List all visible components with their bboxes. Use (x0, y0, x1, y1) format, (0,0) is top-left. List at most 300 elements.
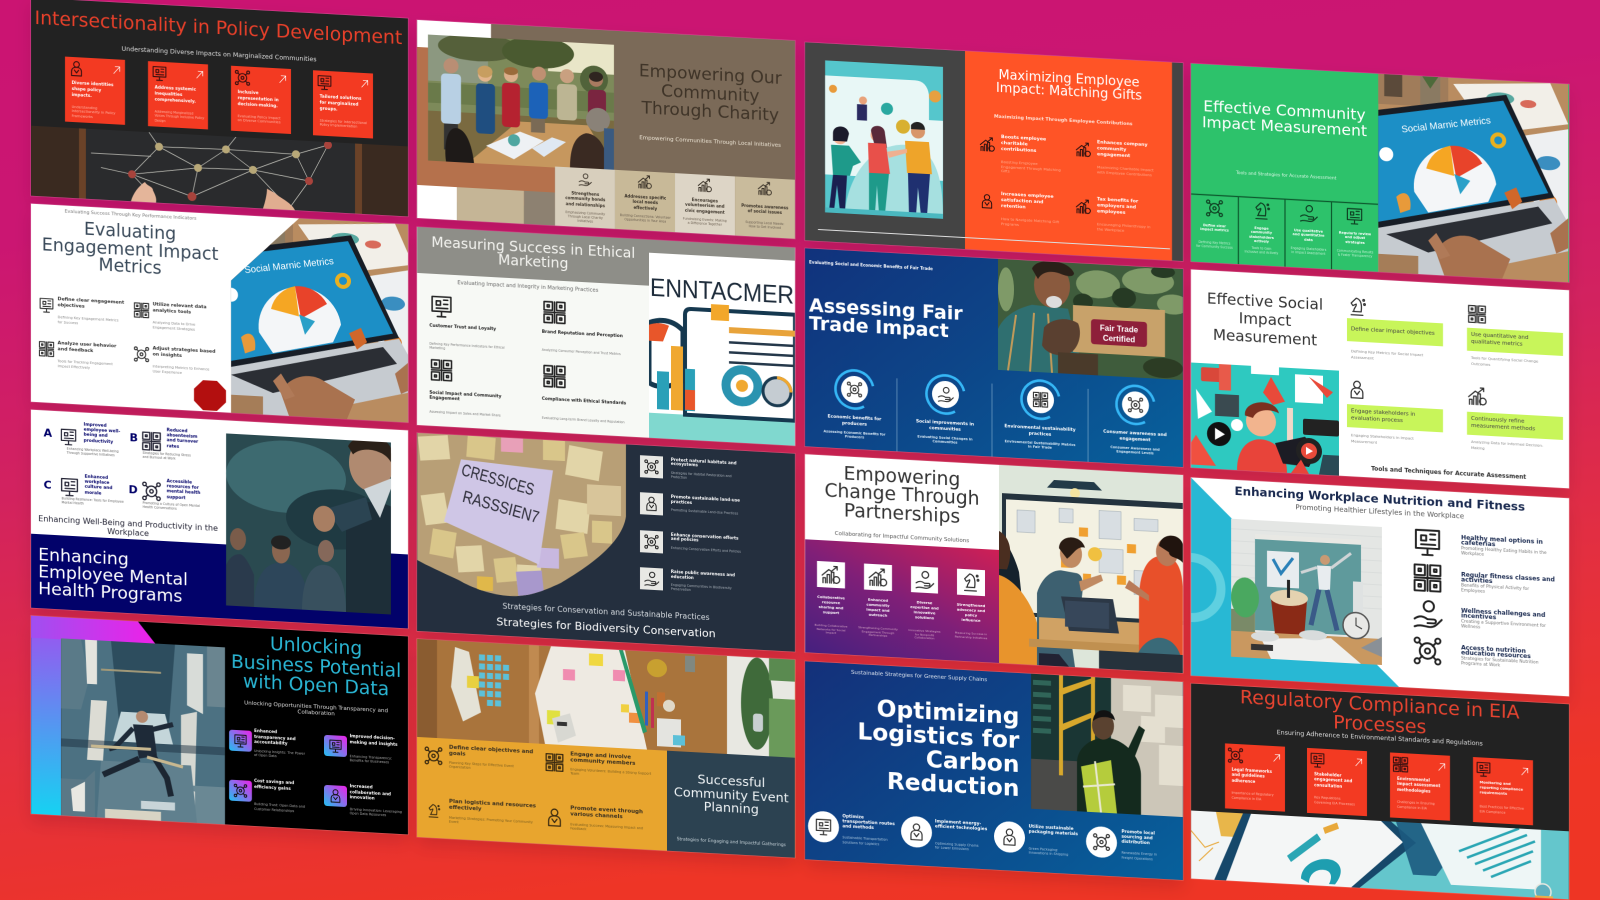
subtitle: Empowering Communities Through Local Initiatives (639, 135, 781, 149)
gradient corner (31, 616, 161, 821)
text: practices (671, 499, 692, 505)
text: on insights (153, 353, 182, 359)
text: Tax benefits for (1097, 197, 1138, 204)
text: Evaluating Success: Measuring Impact and (570, 822, 643, 830)
text: morale (85, 490, 101, 496)
card text: Building Connections: Volunteer (620, 213, 671, 220)
text: Measuring Success in (955, 631, 987, 636)
card text (1480, 780, 1524, 816)
card text: inequalities (155, 90, 182, 97)
title: Marketing (498, 252, 568, 272)
text (254, 778, 305, 814)
text: stakeholders (1249, 234, 1274, 240)
text (808, 594, 854, 637)
photo: laptop with metrics (1378, 74, 1569, 282)
teal diagonal (1191, 477, 1401, 687)
icon (141, 480, 162, 503)
sub text (67, 448, 119, 459)
photo: warehouse worker (1031, 673, 1182, 817)
text: Inclusive and Actively (1245, 249, 1278, 255)
icon: person at podium (70, 60, 82, 77)
icon (1412, 561, 1443, 594)
card text: Addressing Marginalized (155, 110, 194, 116)
text: Defining Key Engagement Metrics (58, 315, 119, 323)
icon (1227, 746, 1244, 764)
photo: pointing businessman (226, 433, 391, 614)
text (671, 495, 740, 517)
letter: A (44, 427, 52, 440)
text: Engagement Strategies (153, 325, 195, 332)
photo: sticky note wall: RASSSIEN7 (461, 487, 541, 527)
icon: arrow (361, 80, 368, 88)
title: Engagement Impact (42, 235, 218, 265)
title (639, 61, 782, 126)
text: Wellness challenges and (1461, 607, 1545, 618)
text: Engagement Through (862, 629, 894, 635)
text: and methods (842, 824, 874, 831)
decorative colour blocks (416, 20, 555, 226)
slate block (667, 751, 795, 858)
text: mental health (167, 490, 200, 497)
icon: gears (234, 70, 250, 86)
card text: Opportunities in Your Area (624, 218, 666, 224)
text (570, 751, 651, 781)
text: Protection (671, 474, 687, 479)
card text: Evaluating Policy Impact (238, 114, 281, 121)
card: strengthens bonds (555, 167, 615, 229)
icon (229, 780, 252, 802)
text: resources for (167, 485, 199, 491)
icon (817, 561, 844, 588)
text: employee well- (84, 428, 120, 435)
card text: groups. (320, 105, 338, 111)
text: Workplace (1461, 552, 1484, 558)
text: Benefits for Businesses (350, 759, 389, 765)
text: Programs (1001, 221, 1019, 227)
text: Improved decision- (350, 734, 395, 741)
text: Team (570, 772, 579, 776)
photo: chalkboard network (32, 126, 408, 216)
text (902, 599, 948, 642)
title: Enhancing (38, 545, 129, 570)
text: Consumer Awareness and (1110, 445, 1160, 451)
icon (426, 800, 441, 821)
photo: farmer with fair trade sign (998, 259, 1182, 380)
illustration: team at whiteboard (999, 465, 1182, 673)
icon (429, 358, 454, 383)
icon (1412, 525, 1443, 558)
text: Enhanced (85, 475, 108, 481)
text: various channels (570, 811, 623, 820)
red hexagon (193, 380, 227, 413)
icon (808, 810, 839, 843)
text: engagement (1097, 152, 1130, 159)
text: Maximizing Charitable Impact (1097, 165, 1154, 173)
panel: Optimizing Logistics for Carbon Reduction (805, 661, 1182, 880)
title: Planning (704, 800, 759, 818)
card text: and relationships (566, 201, 605, 208)
icon: hand and coin (578, 173, 592, 186)
arrow (1353, 756, 1364, 768)
text: efficient technologies (935, 824, 987, 832)
gradient block (805, 539, 999, 663)
text: workplace (85, 480, 109, 486)
panel: Effective Community Impact Measurement (1191, 63, 1568, 282)
sub text: Mental Health (62, 501, 84, 506)
title: Evaluating (84, 220, 176, 245)
illustration: creator with camera (1191, 362, 1339, 475)
icon: arrow (279, 75, 286, 83)
green box (1347, 404, 1443, 432)
item 1 (980, 134, 1061, 174)
text: in Fair Trade (1028, 445, 1052, 450)
icon (994, 820, 1025, 853)
title: Through Charity (642, 99, 779, 126)
card text: shape policy (72, 86, 101, 92)
card text: volunteerism and (685, 202, 725, 209)
icon: chart (758, 182, 772, 196)
text: for Lower Emissions (935, 846, 969, 851)
card text: Stakeholder (1314, 771, 1341, 777)
title: Empowering Our (639, 61, 782, 89)
item 4 (544, 804, 664, 845)
text: Engagement Levels (1116, 450, 1154, 456)
text (1096, 140, 1154, 177)
icon: ring (924, 373, 966, 416)
text: Planning Key Steps for Effective Event (449, 761, 514, 768)
item 1 (808, 810, 898, 855)
text (429, 391, 501, 418)
title: Enhancing Workplace Nutrition and Fitness (1234, 483, 1525, 513)
text: Brand Reputation and Perception (542, 330, 623, 339)
arrow (1519, 765, 1530, 777)
text: Customer Relationships (254, 807, 294, 813)
text: Strategies for Sustainable Nutrition (1461, 656, 1539, 665)
card: local needs (615, 170, 675, 232)
text: in Impact Assessment (1291, 250, 1326, 256)
text (1001, 192, 1059, 227)
text: Assessing Impact on Sales and Market Share (429, 410, 501, 418)
subtitle: Workplace (107, 527, 149, 538)
title (809, 296, 963, 341)
text: absenteeism (167, 434, 198, 440)
title: Metrics (99, 256, 162, 279)
card text (741, 203, 788, 230)
text: Enhanced (254, 728, 277, 735)
title: Empowering (844, 463, 960, 491)
text: Reduced (167, 428, 188, 435)
icon (1412, 597, 1443, 630)
icon: document (318, 75, 332, 90)
green box: Use quantitative and (1471, 331, 1528, 341)
text (153, 347, 216, 377)
text: Define clear objectives and (449, 745, 533, 755)
text (1191, 222, 1238, 251)
text: Partnership Initiatives (955, 634, 987, 640)
icon (640, 530, 663, 553)
photo: laptop with metrics: Social Marnic Metrics (1401, 115, 1492, 135)
subtitle: Sustainable Strategies for Greener Supply Chains (851, 669, 987, 683)
card text: Intersectionality in Policy (72, 109, 115, 116)
card text: Voices Through Inclusive Policy (155, 114, 204, 121)
text (153, 303, 207, 333)
sub text: and Burnout at Work (143, 455, 176, 461)
subtitle: Tools and Strategies for Accurate Assessment (1236, 170, 1336, 181)
title: Trade Impact (809, 312, 949, 342)
text: Protect natural habitats and (671, 456, 737, 465)
text: Promoting Healthy Eating Habits in the (1461, 546, 1547, 556)
card text (1397, 775, 1440, 811)
icon: ring (1114, 383, 1156, 426)
title (805, 463, 999, 530)
illustration: fitness and smoothie (1231, 518, 1382, 664)
text: Evaluating Long-term Brand Loyalty and Reputation (542, 416, 625, 424)
card text (1314, 771, 1355, 807)
text: and adjust (1345, 235, 1365, 240)
panel: Effective Social Impact Measurement (1191, 269, 1568, 488)
sub text: Strategies for Reducing Stress (143, 451, 191, 458)
card text: adherence (1232, 777, 1255, 784)
icon (910, 566, 938, 593)
subtitle: Promoting Healthier Lifestyles in the Workplace (1295, 502, 1464, 520)
text: Engagement Through Matching (1001, 164, 1061, 172)
title (38, 547, 188, 607)
text: Promoting Sustainable Land-Use Practices (671, 508, 738, 516)
card text: Policy Implementation (320, 123, 357, 129)
text (542, 330, 623, 356)
icon (542, 362, 567, 391)
text: Engage (1254, 225, 1269, 230)
item 3 (1347, 378, 1443, 453)
text: Enhances company (1097, 140, 1148, 148)
text: cafeterias (1461, 539, 1495, 548)
card text: Emphasizing Community (565, 210, 605, 217)
text: the Workplace (1097, 226, 1124, 233)
card text: Encourages (692, 197, 718, 204)
sub text: Making (1471, 444, 1485, 450)
photo: sticky note wall: CRESSICES (460, 461, 536, 499)
item 4 (640, 567, 780, 599)
photo: laptop, diagonal crop (230, 218, 408, 422)
item 4 (324, 782, 408, 823)
card text: Through Local Charity (568, 214, 603, 220)
text: Event (449, 820, 459, 825)
eyebrow: Evaluating Success Through Key Performance Indicators (65, 210, 197, 222)
item 1 (429, 292, 524, 357)
text: for Success (58, 320, 78, 325)
text: Solutions for Logistics (842, 840, 879, 846)
green box (1467, 411, 1563, 439)
sub text (143, 502, 200, 513)
item 3 (640, 530, 780, 561)
title: Reduction (887, 767, 1019, 802)
item 3 (429, 356, 524, 421)
title: Partnerships (844, 501, 960, 528)
text: incentives (1461, 612, 1496, 621)
subtitle: Understanding Diverse Impacts on Marginalized Communities (122, 46, 317, 64)
item 4 (1412, 634, 1562, 676)
text (1029, 825, 1078, 858)
text: employers and (1097, 203, 1136, 210)
text: community (866, 602, 890, 608)
text: Employees (1461, 589, 1485, 595)
text: Adjust strategies based (153, 347, 216, 355)
card text: community bonds (565, 196, 605, 203)
card: diverse identities (65, 57, 125, 125)
icon (1309, 751, 1326, 768)
text: Analyze user behavior (58, 341, 116, 350)
item 4 (1076, 196, 1151, 233)
icon: dashboard (1467, 302, 1487, 325)
letter: C (44, 479, 52, 492)
text (167, 479, 200, 502)
card text: How to Get Involved (749, 224, 781, 230)
text: Green Packaging: (1029, 846, 1058, 852)
text: community (1251, 230, 1272, 235)
card: volunteerism (675, 173, 735, 235)
arrow (1271, 751, 1282, 763)
title: with Open Data (243, 671, 389, 700)
text (1461, 645, 1539, 672)
text: Raise public awareness and (671, 569, 735, 577)
title: Community Event (674, 785, 789, 806)
card text: consultation (1314, 782, 1342, 789)
text: Innovative Strategies (908, 628, 941, 634)
text: Open Data Resources (350, 812, 386, 818)
text: sourcing and (1121, 834, 1153, 841)
subtitle (31, 514, 226, 543)
panel: Enhancing Workplace Nutrition and Fitness (1191, 477, 1568, 696)
sub text: Building Resilience: Tools for Employee (62, 497, 124, 504)
text: for Nonprofit (915, 632, 934, 637)
text: efficiency gains (254, 784, 291, 791)
text: Organization (449, 765, 471, 770)
icon (640, 455, 663, 478)
text (842, 815, 895, 848)
panel: Enhancing Employee Mental Health Programs (31, 410, 408, 629)
icon: chess (1252, 200, 1271, 220)
text: Increases employee (1001, 192, 1054, 200)
icon: chart (698, 178, 712, 192)
card text (72, 80, 116, 119)
panel: Maximizing Employee Impact (805, 42, 1182, 261)
text: charitable (1001, 141, 1028, 147)
text: Plan logistics and resources (449, 799, 536, 810)
text: rates (167, 444, 179, 449)
card text: engagement and (1314, 776, 1352, 783)
text: Boosting Employee (1001, 159, 1038, 166)
text: Promote sustainable land-use (671, 494, 740, 503)
title (996, 68, 1142, 104)
text: Engaging Volunteers: Building a Strong Support (570, 767, 651, 776)
card text (154, 85, 204, 123)
card text: Initiatives (578, 219, 593, 224)
metric 4 (1088, 382, 1182, 467)
card text: Promotes awareness (741, 203, 788, 210)
icon: cube (1205, 198, 1224, 218)
icon (864, 563, 892, 591)
title (225, 633, 408, 701)
text: Utilize relevant data (153, 303, 207, 311)
icon: person (982, 194, 992, 209)
text: Regularly review (1339, 230, 1371, 236)
panel: Empowering Change Through Partnerships (805, 454, 1182, 673)
icon (544, 807, 565, 828)
sub text: Assessment (1351, 354, 1374, 360)
icon (324, 785, 347, 807)
green box (1347, 318, 1443, 346)
text (1001, 134, 1061, 174)
card text: a Difference Together (688, 221, 722, 227)
card text: Compliance in EIA (1232, 795, 1261, 801)
item 2 (901, 815, 991, 860)
text: Collaborative (817, 595, 845, 600)
sub text: Measurement (1351, 438, 1377, 444)
sub text: Enhancing Workplace Well-being (67, 447, 119, 454)
text: User Experience (153, 369, 182, 375)
letter: B (130, 431, 138, 445)
card text: Strengthens (571, 190, 599, 197)
text: education resources (1461, 649, 1531, 660)
text: Increased (350, 784, 373, 790)
text: Environmental Sustainability Metrics (1005, 439, 1075, 447)
item 4 (1086, 825, 1176, 870)
icon: chart (638, 175, 652, 190)
item 1 (423, 743, 543, 784)
icon: chart (980, 137, 995, 152)
photo: community group around table (428, 34, 614, 170)
illustration: tablet with documents (1191, 810, 1568, 899)
icon: chart (1076, 142, 1091, 158)
text (935, 820, 987, 853)
text: satisfaction and (1001, 198, 1043, 205)
title (1191, 97, 1378, 139)
text: Social Impact and Community (429, 391, 501, 400)
text (855, 597, 901, 640)
card text: on Diverse Communities (238, 118, 281, 125)
text (429, 324, 505, 354)
card text: Addresses specific (624, 193, 666, 201)
card: inclusive representation (231, 66, 291, 134)
text: culture and (85, 485, 112, 492)
text: Freight Operations (1121, 856, 1153, 862)
icon (59, 476, 80, 499)
text: innovation (350, 795, 375, 801)
text: accountability (254, 739, 288, 746)
text: innovative (914, 610, 935, 615)
navy band (31, 534, 408, 629)
text: Promote event through (570, 805, 643, 815)
text (58, 341, 116, 372)
text: employees (1097, 209, 1125, 215)
text (1096, 196, 1151, 233)
panel: Evaluating Engagement Impact Metrics (31, 204, 408, 423)
text: Communicating Results (1337, 249, 1373, 255)
card text (238, 89, 281, 125)
text: How to Navigate Matching Gift (1001, 216, 1059, 225)
card text: Legal frameworks (1232, 766, 1272, 773)
title: Employee Mental (38, 562, 188, 591)
item 3 (994, 820, 1084, 865)
text: impact and (866, 608, 890, 613)
title (1191, 288, 1339, 351)
text (84, 423, 120, 445)
text: Gifts (1001, 168, 1010, 174)
title: Impact (1239, 309, 1291, 330)
card text: methodologies (1397, 787, 1430, 793)
text: Accessible (167, 479, 192, 486)
text (350, 784, 402, 819)
